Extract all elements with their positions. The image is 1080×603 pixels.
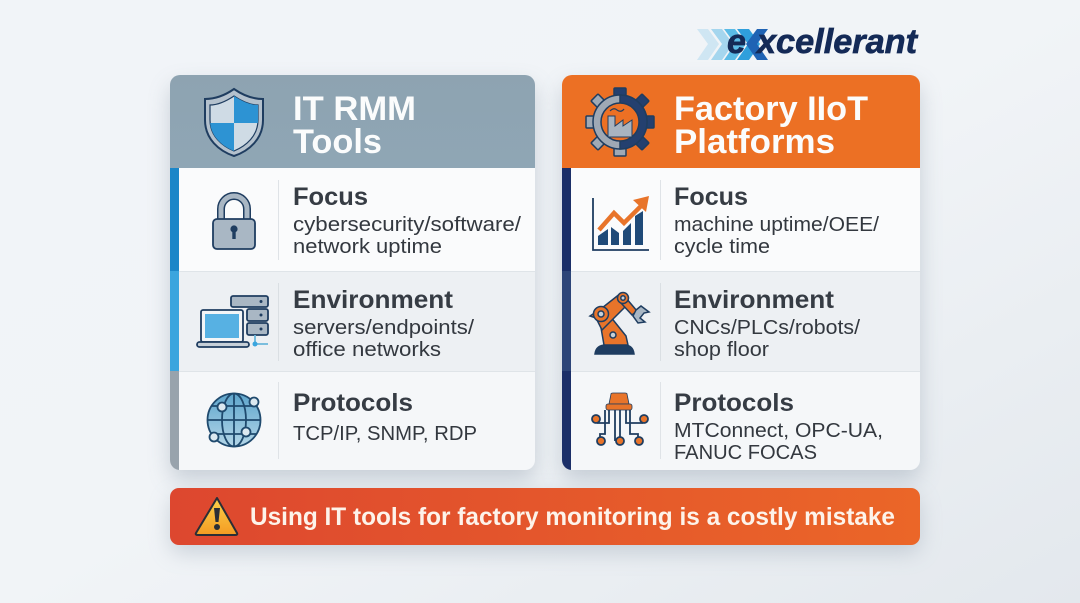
row: Environment — [293, 286, 474, 361]
heading: Factory IIoT Platforms: Platforms — [674, 123, 835, 161]
row: Focus: network uptime — [293, 235, 442, 258]
row: Environment — [674, 286, 860, 361]
icon: laptop and servers — [197, 296, 268, 347]
icon: growth chart — [593, 196, 649, 250]
row: Focus — [674, 183, 879, 258]
row: Protocols: Protocols — [293, 389, 413, 417]
row: Environment: servers/endpoints/ — [293, 316, 474, 339]
heading: Factory IIoT Platforms — [674, 90, 868, 161]
row: Environment: office networks — [293, 338, 441, 361]
row: Protocols — [293, 389, 477, 445]
logo: excellerant: e — [727, 23, 746, 61]
row: Protocols: TCP/IP, SNMP, RDP — [293, 422, 477, 445]
heading: IT RMM Tools: Tools — [293, 123, 382, 161]
row: Focus: Focus — [293, 183, 368, 211]
row: Environment: CNCs/PLCs/robots/ — [674, 316, 860, 339]
heading: IT RMM Tools: IT RMM — [293, 90, 416, 128]
row: Protocols: Protocols — [674, 389, 794, 417]
row: Environment: shop floor — [674, 338, 769, 361]
panel: Factory IIoT Platforms — [562, 75, 920, 480]
icon: globe — [208, 394, 260, 446]
heading: Factory IIoT Platforms: Factory IIoT — [674, 90, 868, 128]
icon: padlock — [213, 196, 255, 249]
icon: warning triangle — [196, 498, 237, 535]
icon: factory gear — [586, 88, 654, 156]
banner text: Using IT tools for factory monitoring is a costly mistake — [250, 503, 895, 531]
row: Focus: Focus — [674, 183, 748, 211]
row: Protocols: MTConnect, OPC-UA, — [674, 419, 883, 442]
row: Focus: cycle time — [674, 235, 770, 258]
icon: shield — [205, 89, 263, 156]
row: Focus: machine uptime/OEE/ — [674, 213, 879, 236]
heading: IT RMM Tools — [293, 90, 416, 161]
row: Protocols: FANUC FOCAS — [674, 441, 817, 464]
icon: robot arm — [590, 292, 649, 354]
row: Focus: cybersecurity/software/ — [293, 213, 521, 236]
row: Protocols — [674, 389, 883, 464]
row: Focus — [293, 183, 521, 258]
icon: protocol network — [592, 393, 648, 445]
row: Environment: Environment — [293, 286, 454, 314]
row: Environment: Environment — [674, 286, 835, 314]
panel: IT RMM Tools — [170, 75, 535, 480]
callout: warning banner — [170, 488, 920, 553]
logo: excellerant: xcellerant — [755, 23, 919, 61]
